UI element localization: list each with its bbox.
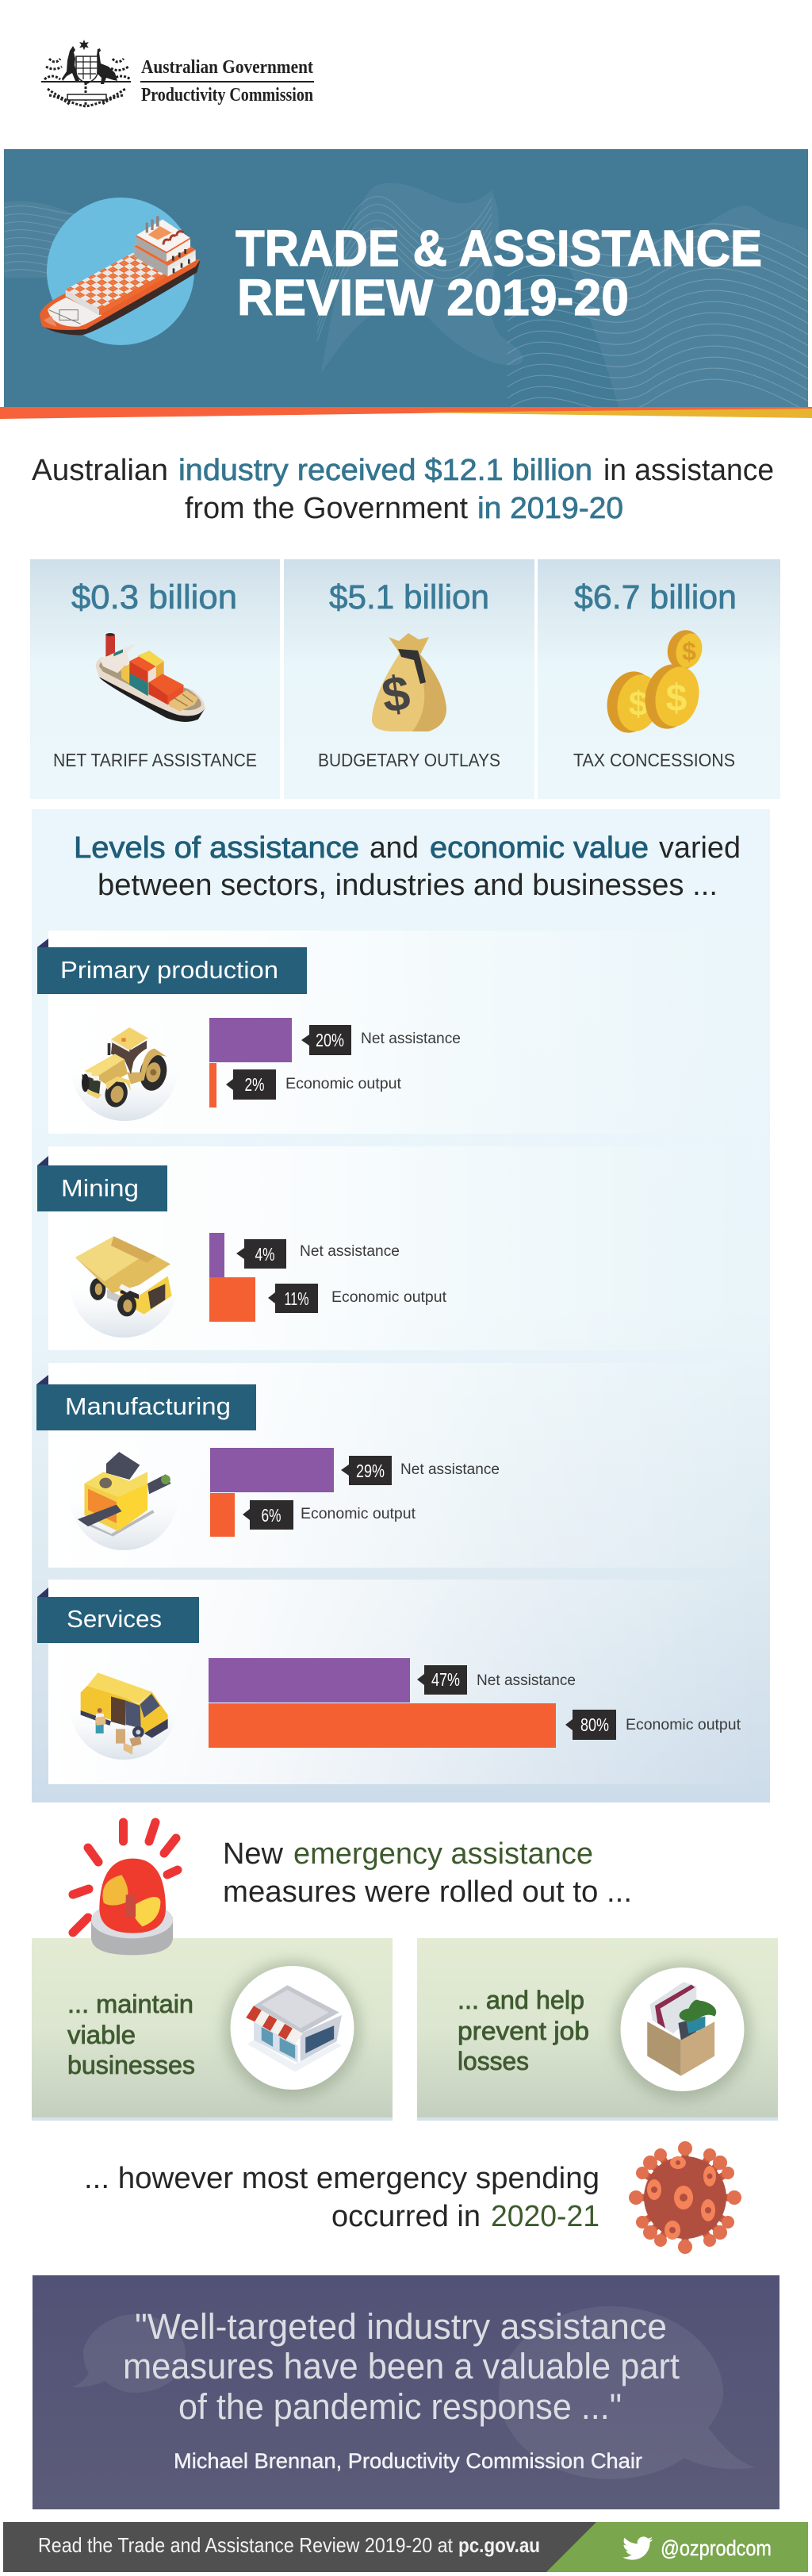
heading: industry received $12.1 billion: in 2019-20 [477, 492, 623, 525]
heading: levels of assistance and economic value: economic value [430, 831, 649, 865]
heading: industry received $12.1 billion [32, 454, 774, 525]
text: prevent job losses [458, 1986, 589, 2075]
icon: money bag: $ [378, 666, 413, 724]
tab: services [37, 1587, 199, 1643]
label: NET TARIFF ASSISTANCE [53, 750, 257, 770]
icon: gold coins [602, 626, 706, 737]
heading: most emergency spending occurred in 2020-21: 2020-21 [491, 2200, 599, 2233]
text: maintain viable businesses: businesses [67, 2051, 195, 2079]
tab: primary production [37, 939, 307, 994]
icon: money bag [372, 633, 446, 731]
title: REVIEW 2019-20 [237, 269, 629, 326]
value: $0.3 billion: $0.3 billion [71, 578, 237, 616]
icon: factory machine [70, 1442, 178, 1550]
heading: levels of assistance and economic value: and [370, 831, 419, 865]
speech bubble: left [71, 2314, 186, 2393]
tab: manufacturing [36, 1375, 256, 1430]
bars: mining [209, 1233, 447, 1322]
icon: tractor [71, 1013, 178, 1121]
heading: levels of assistance and economic value [74, 831, 741, 902]
logo: Australian Government Productivity Commission [41, 40, 314, 106]
text: maintain viable businesses: viable [67, 2021, 136, 2049]
heading: levels of assistance and economic value: varied [659, 831, 741, 865]
bars: manufacturing [210, 1448, 500, 1537]
heading: new emergency assistance [223, 1837, 632, 1909]
heading: most emergency spending occurred in 2020-21 [84, 2162, 599, 2233]
quote text: of the pandemic response ..." [178, 2386, 622, 2427]
sector: mining [37, 1146, 758, 1350]
heading: most emergency spending occurred in 2020-21: occurred in [331, 2200, 481, 2233]
speech bubble: right [499, 2306, 755, 2479]
footer text: Read the Trade and Assistance Review 2019-20 at [38, 2533, 454, 2557]
quote text [123, 2306, 680, 2427]
panel: levels of assistance [32, 809, 770, 1802]
heading: industry received $12.1 billion: in assistance [603, 454, 774, 487]
twitter handle: @ozprodcom [661, 2536, 772, 2560]
tab: services: Services [67, 1605, 162, 1633]
heading: most emergency spending occurred in 2020-21: ... however most emergency spending [84, 2162, 599, 2195]
label: TAX CONCESSIONS [573, 750, 735, 770]
icon: shop [224, 1961, 360, 2098]
panel: tax concessions [538, 559, 780, 799]
icon: siren [73, 1822, 178, 1955]
icon: small cargo ship [96, 633, 205, 722]
bars: services: Economic output [626, 1717, 741, 1733]
icon: twitter bird [622, 2536, 653, 2560]
panel: prevent job losses [417, 1938, 778, 2121]
heading: new emergency assistance: emergency assistance [293, 1837, 593, 1871]
bars: mining: 11% [284, 1288, 309, 1309]
tab: primary production: Primary production [60, 956, 278, 984]
logo text: Productivity Commission: Productivity Commission [141, 85, 313, 106]
bars: mining: 4% [255, 1244, 274, 1265]
footer text: pc.gov.au [458, 2533, 540, 2557]
bars: manufacturing: Economic output [301, 1506, 416, 1522]
logo text: Australian Government: Australian Government [141, 57, 313, 78]
tab: mining [37, 1156, 167, 1211]
panel: net tariff assistance [30, 559, 280, 799]
value: $5.1 billion: $5.1 billion [329, 578, 489, 616]
icon: box of belongings [614, 1963, 750, 2099]
heading: industry received $12.1 billion: industry received $12.1 billion [178, 454, 592, 487]
attribution: Michael Brennan, Productivity Commission Chair [174, 2449, 642, 2473]
icon: virus [629, 2141, 741, 2254]
bars: mining: Net assistance [300, 1243, 400, 1260]
heading: levels of assistance and economic value: between sectors, industries and businesses ... [98, 869, 718, 902]
bars: services: 47% [431, 1669, 460, 1690]
quote text: measures have been a valuable part [123, 2346, 680, 2386]
value: $6.7 billion: $6.7 billion [574, 578, 737, 616]
text: prevent job losses: ... and help [458, 1986, 584, 2014]
bars: manufacturing: Net assistance [400, 1461, 500, 1478]
heading: levels of assistance and economic value: Levels of assistance [74, 831, 359, 865]
bars: services: Net assistance [477, 1672, 576, 1689]
text: prevent job losses: prevent job [458, 2017, 589, 2045]
icon: container ship in blue circle [40, 198, 200, 345]
bars: services: 80% [580, 1714, 609, 1735]
text: maintain viable businesses: ... maintain [67, 1990, 193, 2018]
bars: primary production [209, 1018, 461, 1108]
bars: primary production: 20% [316, 1030, 344, 1050]
heading: new emergency assistance: measures were rolled out to ... [223, 1875, 632, 1909]
bars: manufacturing: 29% [356, 1461, 385, 1481]
heading: new emergency assistance: New [223, 1837, 284, 1871]
title: TRADE & ASSISTANCE [236, 220, 762, 277]
heading: industry received $12.1 billion: from the Government [185, 492, 468, 525]
bars: mining: Economic output [331, 1289, 447, 1306]
icon: mining truck [70, 1230, 178, 1338]
sector: services [37, 1580, 758, 1784]
icon: coat of arms [41, 40, 131, 106]
bars: manufacturing: 6% [262, 1505, 281, 1526]
bars: services [209, 1658, 741, 1748]
icon: gold coins: $ [629, 685, 648, 724]
orange stripe [0, 407, 812, 419]
text: maintain viable businesses [67, 1990, 195, 2079]
sector: manufacturing [36, 1363, 758, 1568]
tab: mining: Mining [61, 1174, 139, 1202]
panel: budgetary outlays [284, 559, 534, 799]
bars: primary production: 2% [244, 1074, 265, 1095]
tab: manufacturing: Manufacturing [65, 1392, 231, 1420]
banner [0, 149, 812, 419]
icon: gold coins: $ [666, 678, 688, 720]
label: BUDGETARY OUTLAYS [318, 750, 500, 770]
text: prevent job losses: losses [458, 2047, 529, 2075]
bars: primary production: Net assistance [361, 1031, 461, 1047]
heading: industry received $12.1 billion: Australian [32, 454, 168, 487]
bars: primary production: Economic output [285, 1076, 402, 1092]
panel: quote [33, 2275, 779, 2509]
title [236, 220, 762, 326]
icon: gold coins: $ [682, 637, 696, 666]
sector: primary production [37, 931, 758, 1134]
panel: maintain viable businesses [32, 1938, 393, 2121]
quote text: "Well-targeted industry assistance [135, 2306, 667, 2347]
icon: delivery van [70, 1652, 178, 1760]
footer [3, 2522, 808, 2572]
